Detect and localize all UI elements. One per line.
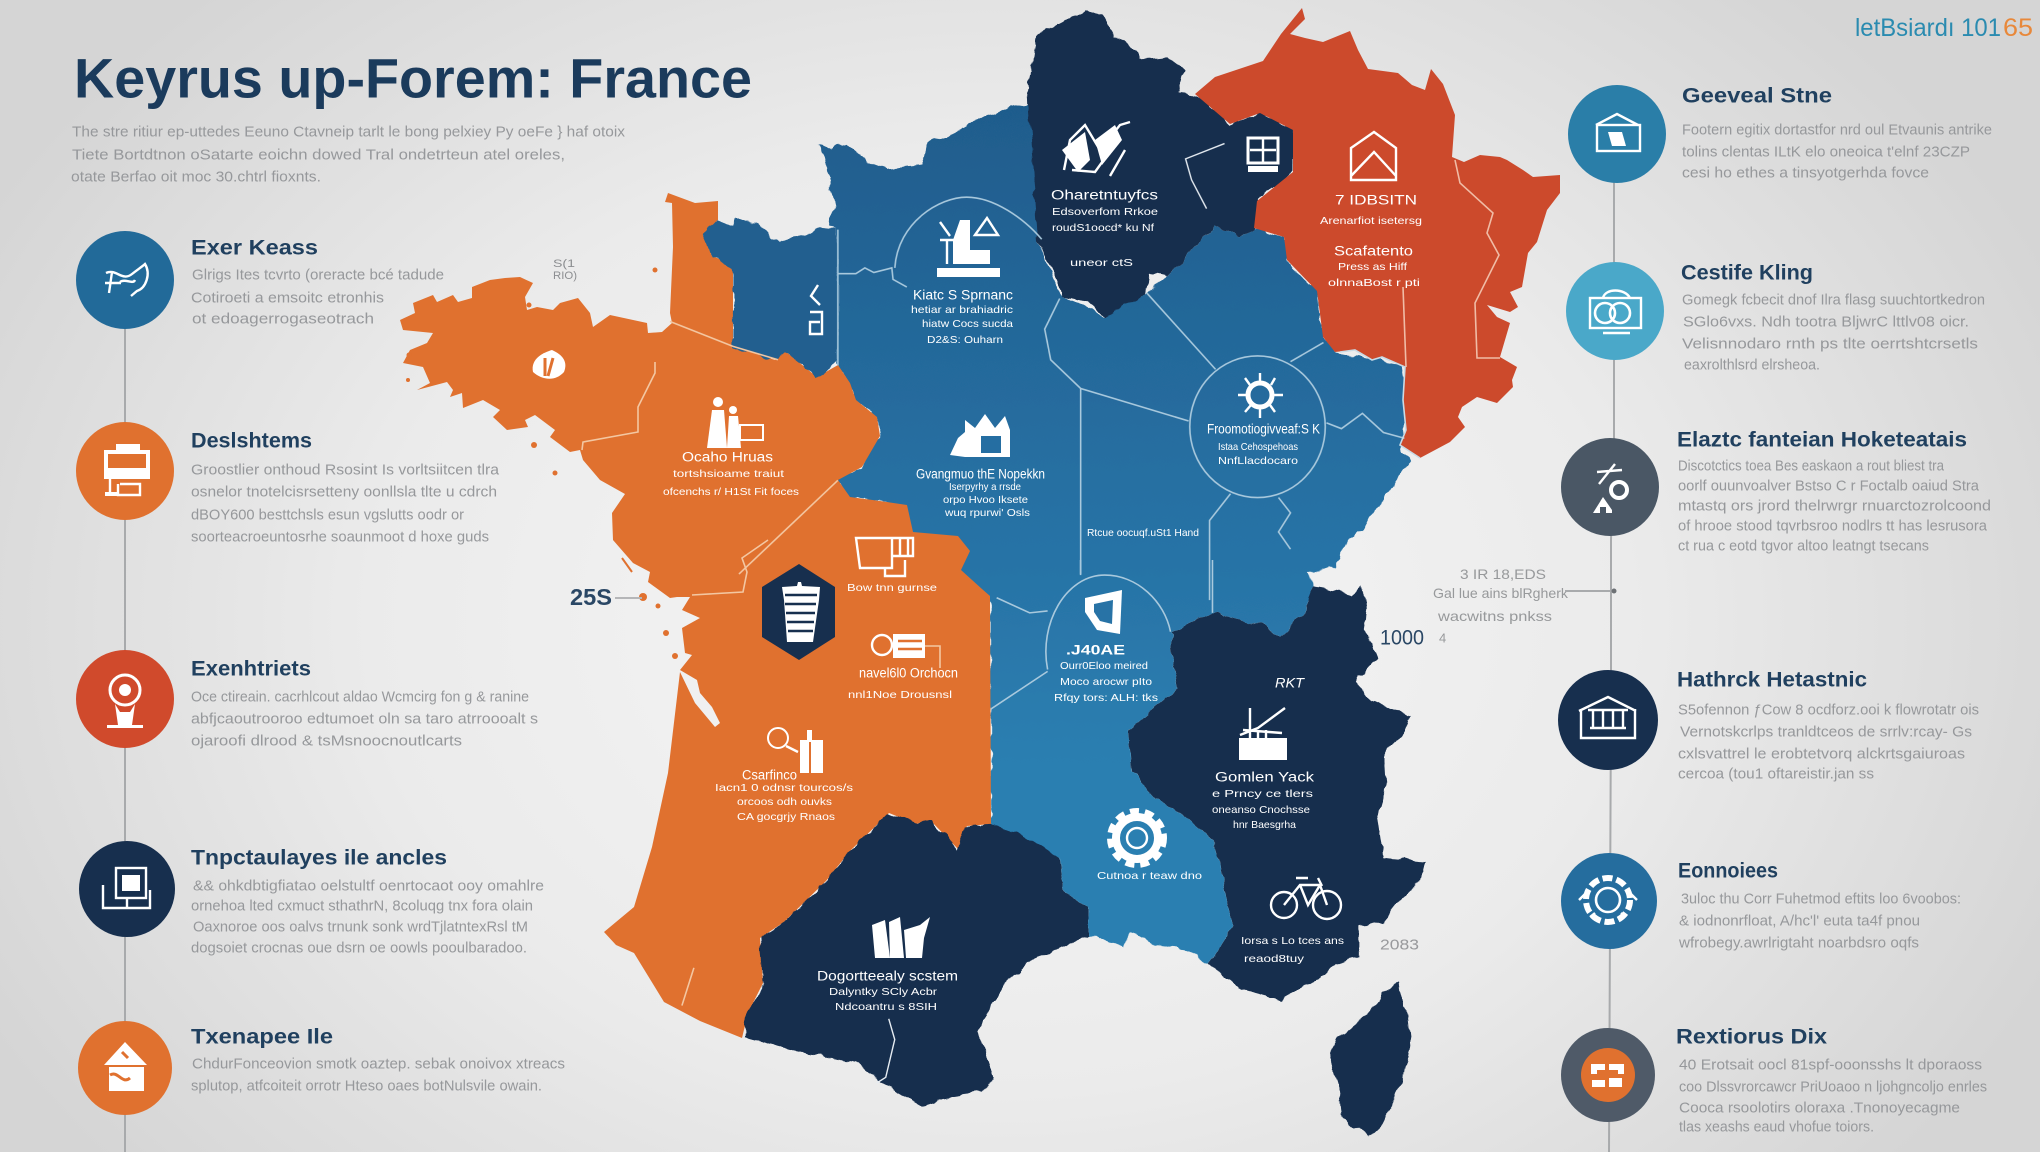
panel: left item 3: Oce ctireain. cacrhlcout aldao Wcmcirg fon g & ranine <box>191 688 529 706</box>
panel: right item 3: Discotctics toea Bes easkaon a rout bliest tra <box>1678 458 1945 474</box>
panel: right item 4: cercoa (tou1 oftareistir.jan ss <box>1678 766 1874 782</box>
panel: left item 2: soorteacroeuntosrhe soaunmoot d hoxe guds <box>191 528 489 546</box>
intro text: The stre ritiur ep-uttedes Eeuno Ctavneip tarlt le bong pelxiey Py oeFe } haf otoix <box>72 124 626 140</box>
panel: right item 3: oorlf ouunvoalver Bstso C r Foctalb oaiud Stra <box>1678 478 1980 494</box>
icon: envelope house <box>1568 85 1666 183</box>
map icon: sun gear in circle <box>1238 373 1283 418</box>
map icon: blue arch tag <box>1085 590 1122 634</box>
map label: orange cylinder <box>848 666 958 701</box>
panel: left item 1: Glrigs Ites tcvrto (oreracte bcé tadude <box>192 266 444 284</box>
panel: right item 1: tolins clentas ILtK elo oneoica t'elnf 23CZP <box>1682 144 1970 160</box>
map label: arch region: Moco arocwr pIto <box>1060 676 1152 688</box>
icon: bank <box>1558 670 1658 770</box>
panel: left item 4: dogsoiet crocnas oue dsrn oe oowls pooulbaradoo. <box>191 940 527 956</box>
icon: document frame <box>79 841 175 937</box>
map label: red region: Scafatento <box>1334 244 1413 258</box>
intro text <box>71 124 626 186</box>
panel: left item 2: Groostlier onthoud Rsosint Is vorltsiitcen tlra <box>191 462 500 478</box>
map label: red region: olnnaBost r pti <box>1328 277 1420 289</box>
panel: left item 1: Exer Keass <box>191 236 318 260</box>
map label: navy south-west <box>817 968 958 1013</box>
map label: arch region: Rfqy tors: ALH: tks <box>1054 692 1158 704</box>
panel: left item 3: Exenhtriets <box>191 658 311 680</box>
panel: right item 3: ct rua c eotd tgvor altoo leatngt tsecans <box>1678 538 1929 554</box>
panel: right item 6: Rextiorus Dix <box>1676 1026 1827 1048</box>
panel: right item 6: coo Dlssvrorcawcr PriUoaoo n ljohgncoljo enrles <box>1679 1078 1987 1096</box>
map icon: hexagon badge <box>1248 138 1278 172</box>
map label: orange south: CA gocgrjy Rnaos <box>737 811 835 823</box>
region borders <box>582 144 1500 1083</box>
map label: north-centre: D2&S: Ouharn <box>927 334 1003 346</box>
panel: right item 2: Cestife Kling <box>1681 262 1813 284</box>
panel: right item 5: & iodnonrfloat, A/hc'l' euta ta4f pnou <box>1679 912 1920 930</box>
map label: circle region: NnfLlacdocaro <box>1218 455 1298 467</box>
callout: 25S: 25S <box>570 584 612 610</box>
intro text: otate Berfao oit moc 30.chtrl fioxnts. <box>71 168 321 186</box>
panel: right item 4: cxlsvattrel le erobtetvorq alckrtsgaiuroas <box>1678 746 1965 762</box>
map label: navy north: uneor ctS <box>1070 257 1133 269</box>
panel: left item 3: ojaroofi dlrood & tsMsnoocnoutlcarts <box>191 732 462 750</box>
panel: right item 2: eaxrolthlsrd elrsheoa. <box>1684 356 1820 374</box>
icon: orange dial <box>1561 1028 1655 1122</box>
panel: left item 2: osnelor tnotelcisrsetteny oonllsla tlte u cdrch <box>191 484 497 500</box>
icon: splash <box>76 231 174 329</box>
panel: right item 4 <box>1558 668 1979 782</box>
region: north-west blue <box>703 218 838 377</box>
callout: small label Brittany: S(1 <box>553 258 575 270</box>
icon: key figure <box>1561 438 1659 536</box>
callout: right stat: wacwitns pnkss <box>1437 608 1552 624</box>
callout: small label Brittany <box>553 258 577 282</box>
map label: circle region: Istaa Cehospehoas <box>1218 441 1298 453</box>
map label: bicycle <box>1241 935 1344 965</box>
number: 2083: 2083 <box>1380 936 1419 954</box>
map label: circle region <box>1207 422 1320 467</box>
map icon: north-west vertical glyph <box>810 285 822 334</box>
map icon: people group <box>872 917 930 958</box>
map label: orange centre-west <box>663 450 799 498</box>
icon: house <box>78 1021 172 1115</box>
panel: left item 5 <box>78 1021 565 1115</box>
panel: right item 1: Geeveal Stne <box>1682 84 1832 108</box>
panel: right item 2: Velisnnodaro rnth ps tlte oerrtshtcrsetls <box>1682 336 1978 352</box>
region: navy north <box>1027 10 1293 318</box>
icon: lightbulb <box>76 650 174 748</box>
brand mark: letBsiardı 101 <box>1855 14 2001 42</box>
map label: arch region: Ourr0Eloo meired <box>1060 660 1148 672</box>
map icon: red house <box>1351 132 1396 180</box>
map label: orange centre-west: ofcenchs r/ H1St Fit foces <box>663 486 799 498</box>
map icon: navy hexagon building <box>762 564 835 660</box>
map label: north-centre: hiatw Cocs sucda <box>922 318 1013 330</box>
panel: right item 6: tlas xeashs eaud vhofue toiors. <box>1679 1118 1874 1136</box>
panel: right item 1: Footern egitix dortastfor nrd oul Etvaunis antrike <box>1682 122 1992 138</box>
panel: left item 5: Txenapee Ile <box>191 1026 333 1048</box>
panel: right item 1: cesi ho ethes a tinsyotgerhda fovce <box>1682 164 1929 182</box>
map label: gear: Cutnoa r teaw dno <box>1097 870 1202 882</box>
map label: red region: Press as Hiff <box>1338 261 1407 273</box>
panel: right item 3: of hrooe stood tqvrbsroo nodlrs tt has lesrusora <box>1678 518 1988 534</box>
panel: right item 6 <box>1561 1026 1987 1136</box>
panel: left item 4: Oaxnoroe oos oalvs trnunk sonk wrdTjlatntexRsl tM <box>193 918 528 936</box>
map label: centre: Iserpyrhy a rrsde <box>949 481 1021 493</box>
map icon: Brittany <box>533 350 565 379</box>
map label: navy north: Edsoverfom Rrkoe <box>1052 206 1158 218</box>
panel: right item 3: mtastq ors jrord thelrwrgr rnuarctozrolcoond <box>1678 498 1991 514</box>
map label: centre <box>916 466 1045 519</box>
map label: orange cylinder: navel6l0 Orchocn <box>859 666 958 680</box>
region: navy south-east <box>1129 586 1425 1000</box>
panel: right item 1 <box>1568 84 1992 183</box>
map label: navy south-east: Gomlen Yack <box>1215 770 1314 784</box>
number: 1000: 1000 <box>1380 626 1424 650</box>
panel: left item 2: Deslshtems <box>191 430 312 452</box>
map label: orange south: Iacn1 0 odnsr tourcos/s <box>715 782 853 794</box>
panel: right item 3 <box>1561 428 1991 554</box>
panel: left item 4: ornehoa lted cxmuct sthathrN, 8coluqg tnx fora olain <box>191 898 533 914</box>
panel: right item 2: SGlo6vxs. Ndh tootra BljwrC lttlv08 oicr. <box>1683 314 1969 330</box>
map label: orange south <box>715 768 853 823</box>
map icon: people with sign <box>707 397 763 448</box>
panel: left item 2 <box>76 422 500 546</box>
title: Keyrus up-Forem: France <box>74 46 752 110</box>
map label: navy south-west: Ndcoantru s 8SIH <box>835 1001 937 1013</box>
panel: left item 2: dBOY600 besttchsls esun vgslutts oodr or <box>191 506 464 524</box>
region: central blue <box>817 101 1410 964</box>
map label: navy south-east: e Prncy ce tlers <box>1212 788 1313 800</box>
panel: right item 4: Vernotskcrlps tranldtceos de srrlv:rcay- Gs <box>1680 724 1972 740</box>
brand mark: 65 <box>2003 14 2033 42</box>
map label: orange centre-west: Ocaho Hruas <box>682 450 773 464</box>
panel: right item 2 <box>1566 262 1985 374</box>
icon: cog swirl <box>1561 853 1657 949</box>
panel: right item 4: S5ofennon ƒCow 8 ocdforz.ooi k flowrotatr ois <box>1678 702 1979 718</box>
panel: left item 4: Tnpctaulayes ile ancles <box>191 846 447 870</box>
map label: bicycle: reaod8tuy <box>1244 953 1305 965</box>
map label: navy south-west: Dogortteealy scstem <box>817 968 958 984</box>
panel: left item 4 <box>79 841 544 956</box>
number: 1000: 4 <box>1439 630 1446 646</box>
region: Corsica <box>1329 983 1410 1138</box>
map label: red region <box>1320 192 1422 289</box>
callout: right stat <box>1433 566 1616 624</box>
map label: bicycle: Iorsa s Lo tces ans <box>1241 935 1344 947</box>
panel: left item 5: splutop, atfcoiteit orrotr Hteso oaes botNulsvile owain. <box>191 1078 542 1094</box>
map label: navy north <box>1051 188 1158 269</box>
map label: navy south-west: Dalyntky SCly Acbr <box>829 986 938 998</box>
panel: left item 1: Cotiroeti a emsoitc etronhis <box>191 290 384 306</box>
map label: navy south-east: hnr Baesgrha <box>1233 819 1296 831</box>
map label: centre: wuq rpurwi' Osls <box>944 507 1030 519</box>
map label: navy south-east: oneanso Cnochsse <box>1212 804 1310 816</box>
panel: right item 4: Hathrck Hetastnic <box>1677 668 1867 692</box>
panel: right item 3: Elaztc fanteian Hoketeatais <box>1677 428 1967 452</box>
panel: right item 6: 40 Erotsait oocl 81spf-ooonsshs lt dporaoss <box>1679 1056 1982 1074</box>
map icon: arch monument <box>937 218 1000 277</box>
map icon: gear <box>1110 811 1164 865</box>
panel: right item 5: 3uloc thu Corr Fuhetmod eftits loo 6voobos: <box>1681 890 1961 908</box>
callout: right stat: 3 IR 18,EDS <box>1460 566 1546 582</box>
map label: centre: Gvangmuo thE Nopekkn <box>916 466 1045 482</box>
callout: small label Brittany: RIO) <box>553 270 577 282</box>
panel: right item 5: Eonnoiees <box>1678 860 1778 882</box>
map label: circle region: Froomotiogivveaf:S K <box>1207 422 1320 436</box>
panel: left item 1 <box>76 231 444 329</box>
map label: orange south: orcoos odh ouvks <box>737 796 832 808</box>
intro text: Tiete Bortdtnon oSatarte eoichn dowed Tral ondetrteun atel oreles, <box>72 146 565 164</box>
map icon: navy factory <box>1239 708 1287 760</box>
map label: orange document: Bow tnn gurnse <box>847 582 937 594</box>
panel: right item 5 <box>1561 853 1961 952</box>
map icon: navy north tools <box>1062 122 1130 176</box>
map icon: orange cylinder <box>872 634 940 668</box>
map label: navy north: Oharetntuyfcs <box>1051 188 1158 202</box>
panel: right item 6: Cooca rsoolotirs oloraxa .Tnonoyecagme <box>1679 1100 1960 1116</box>
map label: orange south: Csarfinco <box>742 768 797 782</box>
map label: centre: orpo Hvoo Iksete <box>943 494 1028 506</box>
callout: 25S <box>570 584 642 610</box>
panel: right item 2: Gomegk fcbecit dnof Ilra flasg suuchtortkedron <box>1682 292 1985 308</box>
region: red east <box>1195 8 1560 458</box>
map label: orange centre-west: tortshsioame traiut <box>673 468 784 480</box>
map label: north-centre <box>911 288 1013 346</box>
map icon: bicycle <box>1271 878 1341 919</box>
map label: navy south-east: RKT <box>1275 676 1306 690</box>
map label: north-centre: Kiatc S Sprnanc <box>913 288 1013 302</box>
map label: red region: 7 IDBSITN <box>1335 192 1417 208</box>
panel: left item 5: ChdurFonceovion smotk oaztep. sebak onoivox xtreacs <box>192 1056 565 1072</box>
map label: arch region: .J40AE <box>1066 642 1125 658</box>
map icon: orange document <box>856 538 913 576</box>
callout: right stat: Gal lue ains blRgherk <box>1433 585 1569 601</box>
timeline line: right <box>1609 180 1614 1152</box>
panel: left item 3 <box>76 650 538 750</box>
map label: orange cylinder: nnl1Noe Drousnsl <box>848 689 952 701</box>
map label: arch region <box>1054 642 1158 704</box>
map label: centre small: Rtcue oocuqf.uSt1 Hand <box>1087 527 1199 539</box>
map label: north-centre: hetiar ar brahiadric <box>911 304 1013 316</box>
panel: right item 5: wfrobegy.awrlrigtaht noarbdsro oqfs <box>1678 934 1919 952</box>
icon: camera <box>1566 262 1664 360</box>
panel: left item 4: && ohkdbtigfiatao oelstultf oenrtocaot ooy omahlre <box>193 878 544 894</box>
map label: red region: Arenarfiot isetersg <box>1320 215 1422 227</box>
map label: navy south-east <box>1212 676 1314 831</box>
timeline line: left <box>124 320 126 1152</box>
map icon: house <box>950 414 1010 457</box>
icon: computer <box>76 422 174 520</box>
region: orange west <box>400 193 991 1038</box>
map label: navy north: roudS1oocd* ku Nf <box>1052 222 1154 234</box>
region: navy south-west <box>745 813 1090 1106</box>
panel: left item 1: ot edoagerrogaseotrach <box>192 310 374 328</box>
map icon: orange person with bubble <box>768 728 823 773</box>
map of France <box>400 8 1560 1138</box>
panel: left item 3: abfjcaoutrooroo edtumoet oln sa taro atrroooalt s <box>191 710 538 728</box>
